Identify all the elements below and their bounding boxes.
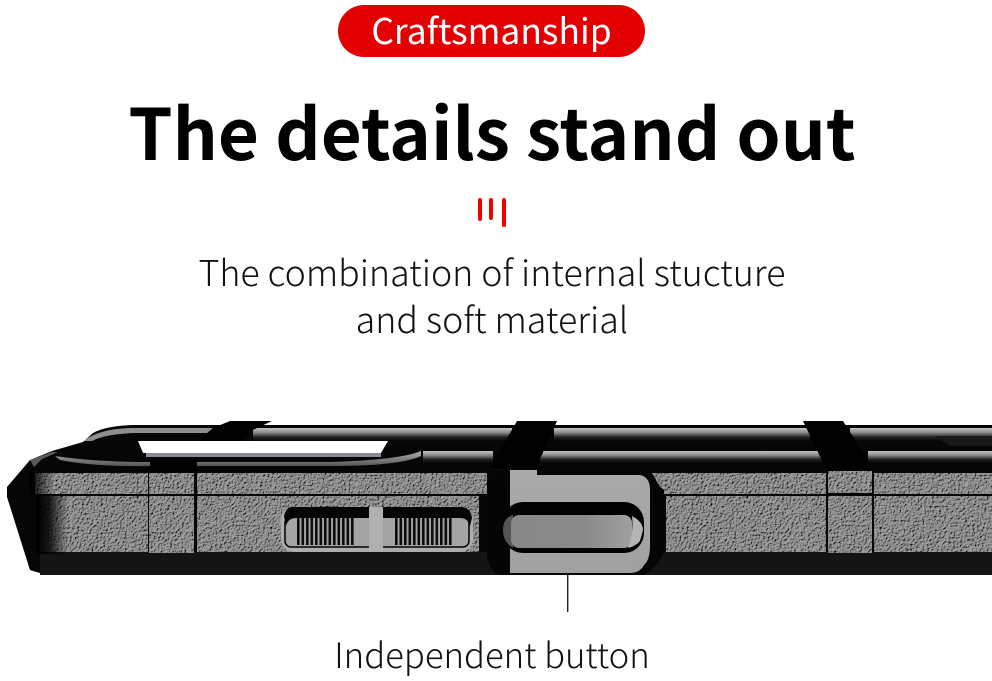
title: The details stand out [128,79,856,181]
product image: phone case side view [7,421,992,612]
top rail highlights [253,428,992,463]
phone case body [7,425,992,575]
icon: red accent bars [478,198,506,227]
subtitle text: and soft material [356,293,628,344]
badge: Craftsmanship: Craftsmanship [371,4,612,55]
subtitle text [198,246,785,344]
volume button [281,507,473,552]
independent button housing [487,470,664,575]
subtitle text: The combination of internal stucture [198,246,785,297]
camera window [55,441,421,466]
leader line [567,575,568,612]
textured grip panels [35,471,992,553]
straps [150,421,992,473]
left edge shadow [30,472,68,554]
label: Independent button: Independent button [334,628,650,678]
